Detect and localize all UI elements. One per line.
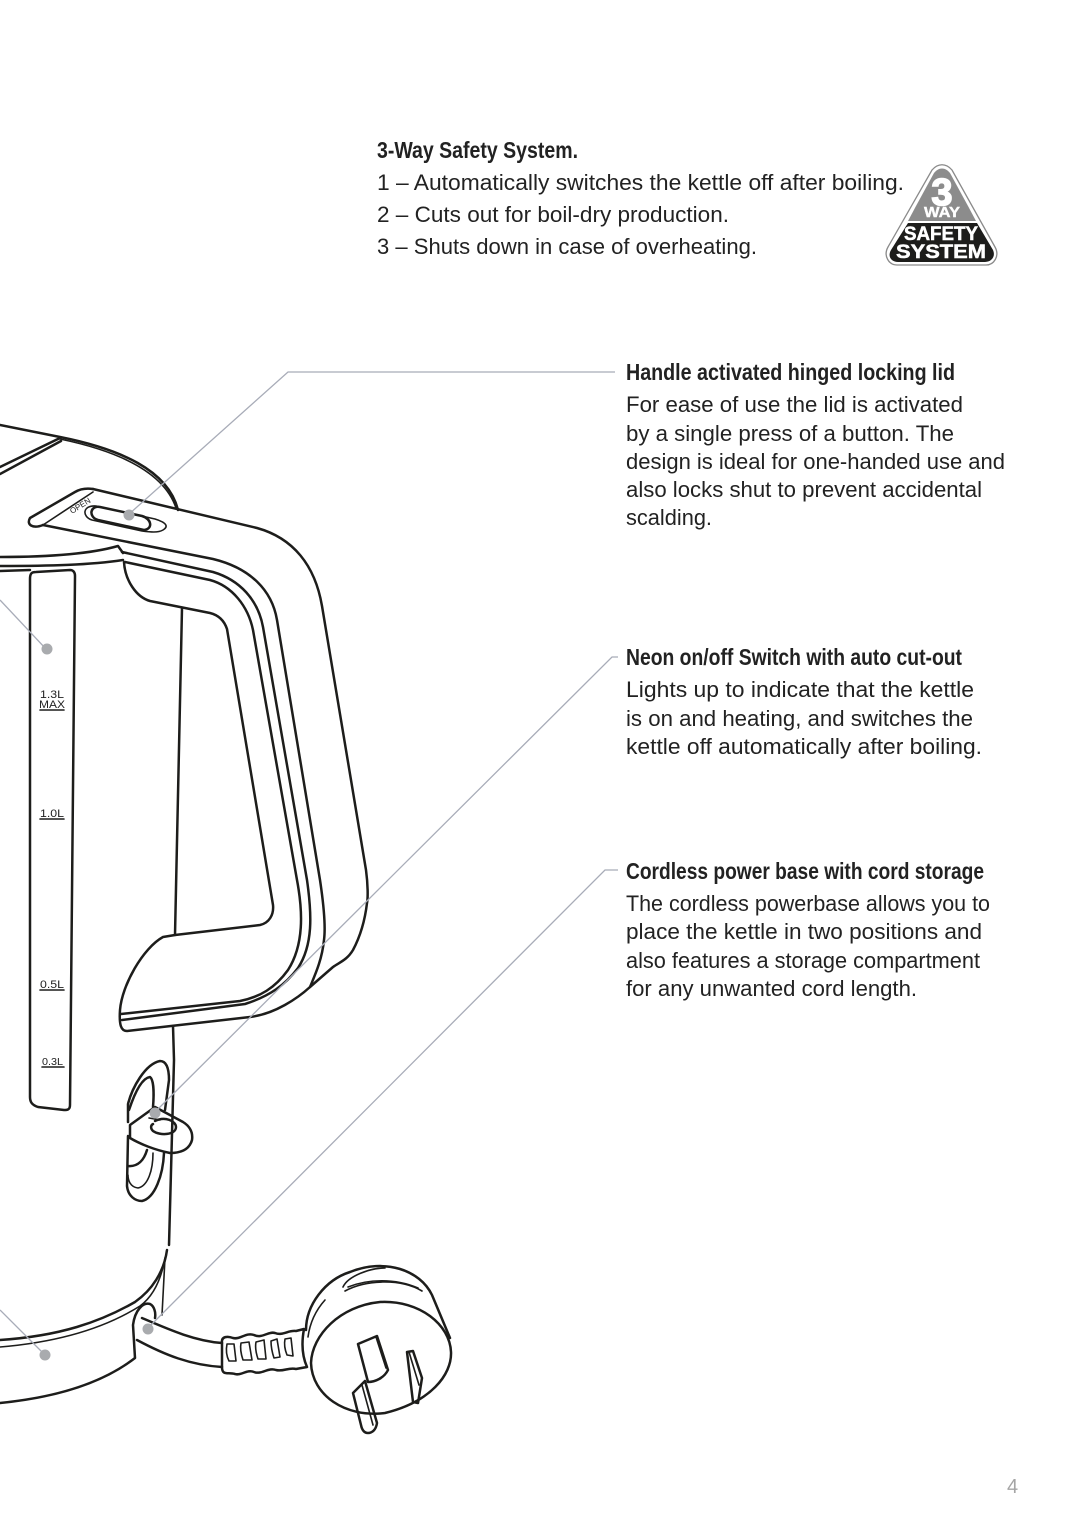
page number: 4 (1007, 1476, 1018, 1498)
water level window (30, 570, 75, 1110)
level: 1.3L MAX (39, 689, 66, 711)
badge: 3 way safety system: 3 (931, 172, 953, 214)
body text: Lights up to indicate that the kettle (626, 677, 974, 702)
kettle rim (0, 546, 123, 571)
leader line: locking lid (124, 372, 615, 520)
body text: is on and heating, and switches the (626, 706, 973, 731)
section: 3-way safety system (377, 137, 904, 259)
badge: 3 way safety system (886, 165, 997, 265)
heading: Handle activated hinged locking lid (626, 359, 955, 385)
body text: The cordless powerbase allows you to (626, 891, 990, 916)
power cord (137, 1318, 222, 1367)
body text (626, 677, 982, 759)
leader line: base left (0, 1310, 50, 1360)
level: 1.3L MAX: MAX (39, 699, 66, 711)
body text: also locks shut to prevent accidental (626, 477, 982, 502)
body text (626, 891, 990, 1001)
illustration: kettle with plug (0, 425, 451, 1433)
body text: for any unwanted cord length. (626, 976, 917, 1001)
open button (68, 496, 166, 532)
list item 2: 2 – Cuts out for boil-dry production. (377, 202, 729, 227)
section: neon on/off switch (626, 644, 982, 759)
level: 0.5L: 0.5L (40, 979, 64, 991)
heading: Neon on/off Switch with auto cut-out (626, 644, 962, 670)
open button: OPEN (68, 496, 92, 516)
leader line: cordless base (142, 870, 618, 1334)
level: 1.0L: 1.0L (40, 808, 64, 820)
kettle handle (29, 489, 368, 1031)
body text: by a single press of a button. The (626, 421, 954, 446)
plug pins (353, 1336, 422, 1433)
body text: kettle off automatically after boiling. (626, 734, 982, 759)
plug (306, 1266, 451, 1433)
body text: place the kettle in two positions and (626, 919, 982, 944)
body text: also features a storage compartment (626, 948, 981, 973)
power switch (127, 1061, 192, 1201)
heading: 3-Way Safety System. (377, 137, 578, 163)
body text: scalding. (626, 505, 712, 530)
body text: design is ideal for one-handed use and (626, 449, 1005, 474)
cord grommet (222, 1329, 307, 1374)
body text: For ease of use the lid is activated (626, 392, 963, 417)
badge: 3 way safety system: SAFETY (904, 224, 978, 245)
badge: 3 way safety system: WAY (924, 204, 960, 221)
level: 1.3L MAX: 1.3L (40, 689, 64, 701)
body text (626, 392, 1005, 530)
leader line: neon switch (150, 657, 618, 1118)
leader line: water window (0, 600, 52, 654)
section: handle activated hinged locking lid (626, 359, 1005, 530)
badge: 3 way safety system: SYSTEM (896, 242, 986, 263)
section: cordless power base (626, 858, 990, 1001)
list item 1: 1 – Automatically switches the kettle off after boiling. (377, 170, 904, 195)
list item 3: 3 – Shuts down in case of overheating. (377, 234, 757, 259)
kettle lid (0, 425, 178, 510)
level: 0.3L: 0.3L (42, 1057, 63, 1068)
heading: Cordless power base with cord storage (626, 858, 984, 884)
kettle body (0, 608, 182, 1403)
